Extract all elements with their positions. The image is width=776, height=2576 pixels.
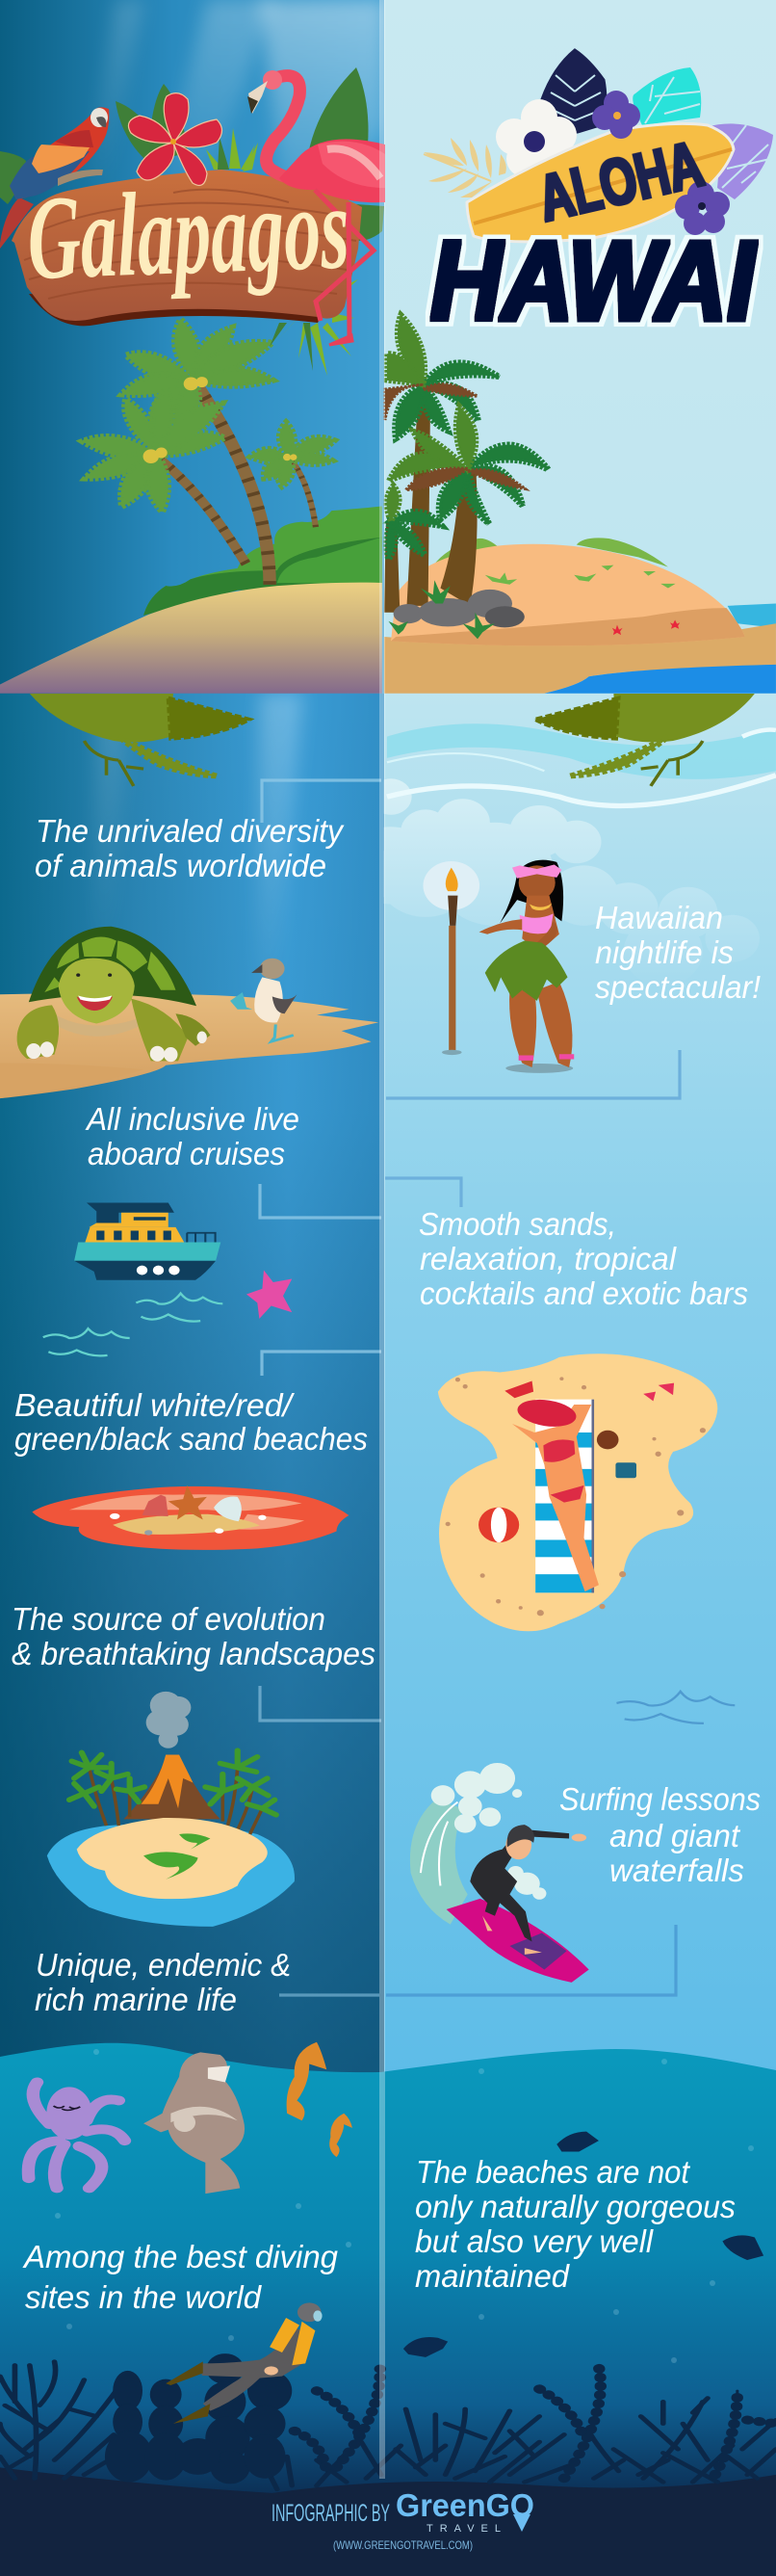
panel: left background middle <box>0 694 384 2090</box>
foam <box>431 1763 546 1900</box>
text: Galapagos 5: Unique, endemic & <box>36 1947 291 1983</box>
trunks <box>384 389 478 613</box>
purple hibiscus top <box>592 91 640 139</box>
logo: Aloha Hawaii <box>424 50 773 242</box>
surfboard <box>447 1899 589 1983</box>
text: Hawaii 3: Surfing lessons <box>559 1781 761 1817</box>
body plate <box>54 1013 151 1037</box>
back leaves <box>0 67 384 241</box>
title: Galapagos: Galapagos <box>25 161 351 304</box>
panel: right background <box>384 0 776 2090</box>
flamingo <box>247 70 385 345</box>
sand lower beach <box>384 623 776 694</box>
purple leaf <box>706 123 773 199</box>
wave ribbons <box>387 723 776 805</box>
text: Galapagos 4 line 2: & breathtaking landscapes <box>12 1636 375 1671</box>
small plants and star <box>485 565 676 588</box>
seahorses <box>287 2042 352 2157</box>
text: Galapagos 5 line 2: rich marine life <box>35 1982 237 2017</box>
rocks <box>394 590 525 627</box>
text: Hawaii 1 line 3: spectacular! <box>595 969 761 1005</box>
purple hibiscus bottom <box>675 181 730 235</box>
text: Galapagos 4: The source of evolution <box>12 1601 325 1637</box>
beach items <box>479 1380 674 1542</box>
scuba diver <box>166 2302 323 2424</box>
shell <box>29 927 196 1006</box>
sand specks <box>446 1377 706 1616</box>
hill bushes <box>433 538 668 566</box>
title: Aloha: ALOHA <box>531 127 710 236</box>
illustration: turtle and booby on sand <box>0 927 378 1098</box>
connector lines <box>260 780 680 1995</box>
footer logo pin <box>513 2514 530 2532</box>
text: Hawaii 2 line 2: relaxation, tropical <box>420 1241 678 1276</box>
sand dune <box>0 583 382 694</box>
dark green fronds <box>386 362 549 560</box>
wave marks <box>43 1294 222 1355</box>
teal leaf <box>633 67 701 125</box>
text: Hawaii 4 line 4: maintained <box>415 2258 571 2294</box>
illustration: hula dancer <box>479 860 574 1073</box>
illustration: volcano island <box>47 1692 295 1927</box>
text: Galapagos 3: Beautiful white/red/ <box>14 1387 295 1423</box>
text: Galapagos 2: All inclusive live <box>85 1101 299 1137</box>
illustration: sea creatures <box>0 2042 776 2576</box>
text: Hawaii 4: The beaches are not <box>416 2154 691 2190</box>
brown fronds <box>385 383 526 490</box>
text: Galapagos 3 line 2: green/black sand beaches <box>14 1421 368 1457</box>
illustration: cruise boat <box>74 1203 220 1280</box>
text: Hawaii 1: Hawaiian <box>595 900 723 935</box>
illustration: Galapagos island with palms <box>0 319 382 694</box>
footer <box>272 2487 534 2552</box>
sand blob <box>438 1354 717 1631</box>
illustration: right hanging leaves <box>534 694 755 786</box>
towel <box>535 1400 594 1592</box>
white flower <box>496 99 577 177</box>
coral silhouettes <box>0 2353 776 2576</box>
palm fronds <box>69 1750 276 1815</box>
text: Hawaii 2: Smooth sands, <box>419 1206 616 1242</box>
wave marks right <box>616 1692 735 1723</box>
footer logo wordmark: GreenGO <box>396 2487 534 2523</box>
illustration: sunbathing woman <box>438 1354 717 1631</box>
red plumeria flower <box>128 93 221 185</box>
octopus <box>28 2082 125 2188</box>
divider <box>379 0 385 2479</box>
volcano <box>123 1754 220 1819</box>
tan leaf <box>424 138 506 197</box>
bushes <box>143 507 382 616</box>
text: Galapagos 1 line 2: of animals worldwide <box>35 848 326 883</box>
booby bird <box>230 959 297 1041</box>
claws <box>26 1032 207 1062</box>
footer url: (WWW.GREENGOTRAVEL.COM) <box>333 2538 473 2552</box>
text: Hawaii 3 line 2: and giant <box>609 1818 741 1853</box>
panel: left background top <box>0 0 385 694</box>
text: Galapagos 6: Among the best diving <box>22 2239 339 2274</box>
illustration: left hanging leaves <box>30 694 250 786</box>
scarlet macaw <box>0 107 109 249</box>
illustration: red sand beach <box>32 1485 349 1550</box>
fish silhouettes <box>403 2132 763 2357</box>
text: Hawaii 4 line 2: only naturally gorgeous <box>415 2189 736 2224</box>
wood plank <box>12 170 362 321</box>
panel: right waves and clouds <box>383 723 776 942</box>
text: Hawaii 4 line 3: but also very well <box>415 2223 655 2259</box>
sparkles <box>22 2049 754 2545</box>
wood plank shadow <box>29 293 342 326</box>
wood grain <box>24 190 356 299</box>
sand <box>0 993 378 1098</box>
palm trunks <box>161 388 316 585</box>
coconuts <box>143 377 297 463</box>
illustration: tiki torch <box>423 861 479 1055</box>
illustration: Hawaii island with palms <box>384 315 776 694</box>
text: Galapagos 6 line 2: sites in the world <box>25 2279 263 2315</box>
palm trunks <box>90 1768 262 1834</box>
clouds <box>383 778 759 942</box>
water foreground <box>544 665 776 694</box>
seal <box>143 2052 245 2194</box>
text: Galapagos 1: The unrivaled diversity <box>36 813 345 849</box>
text: Hawaii 3 line 3: waterfalls <box>609 1853 744 1888</box>
woman body <box>512 1405 599 1591</box>
illustration: starfish <box>246 1271 292 1319</box>
lizards <box>143 1852 198 1879</box>
back grass <box>206 128 258 171</box>
panel: underwater background <box>0 2043 776 2576</box>
footer travel: TRAVEL <box>427 2523 508 2535</box>
navy monstera leaf <box>542 50 606 132</box>
text: Hawaii 1 line 2: nightlife is <box>595 934 734 970</box>
legs <box>17 1005 59 1059</box>
illustration: surfer <box>410 1763 589 1983</box>
footer credit: INFOGRAPHIC BY <box>272 2500 390 2527</box>
text: Hawaii 2 line 3: cocktails and exotic bars <box>420 1275 748 1311</box>
smoke <box>146 1692 191 1748</box>
palm fronds <box>82 319 334 513</box>
light green fronds <box>386 315 476 521</box>
sand hill <box>391 544 745 645</box>
water <box>47 1824 295 1927</box>
logo: Galapagos wood sign <box>0 67 385 376</box>
text: Galapagos 2 line 2: aboard cruises <box>88 1136 285 1171</box>
head <box>59 959 135 1024</box>
surfer figure <box>470 1829 569 1941</box>
sea strip <box>728 604 776 628</box>
island <box>77 1818 268 1899</box>
surfboard <box>467 123 734 242</box>
wave <box>410 1800 468 1925</box>
